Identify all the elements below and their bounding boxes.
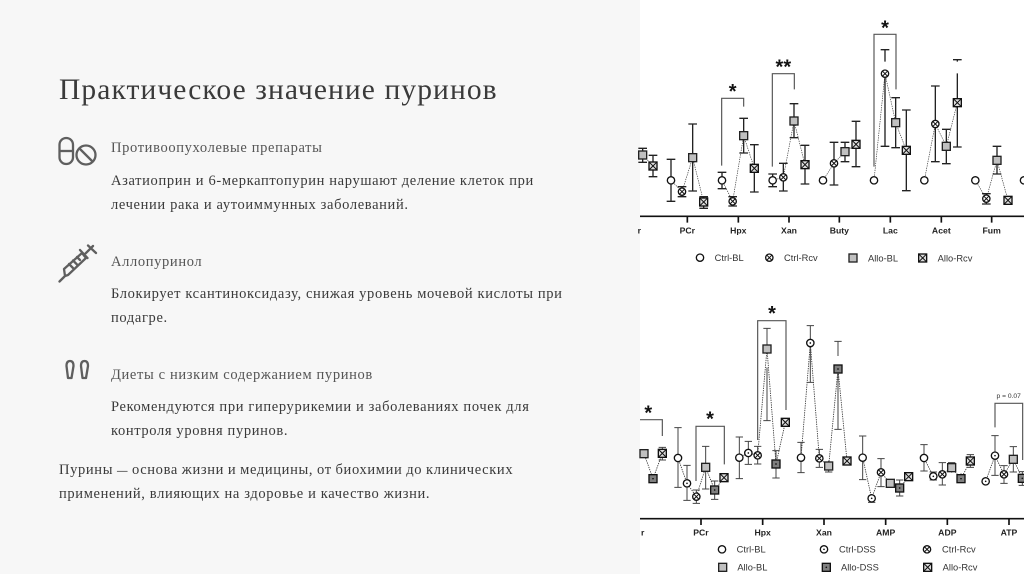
legend: Ctrl-Rcv [942, 545, 976, 555]
heading: allopurinol: Аллопуринол [111, 254, 202, 270]
text block: allopurinol [111, 286, 563, 326]
error bars [659, 326, 1024, 503]
data markers [640, 339, 1024, 502]
legend: Ctrl-BL [715, 253, 744, 263]
text block: low purine diets [111, 398, 530, 438]
text block: conclusion [59, 462, 513, 502]
legend: Allo-Rcv [938, 254, 973, 264]
x axis: Lac [883, 225, 898, 235]
x axis [640, 519, 1024, 538]
significance stars: * [729, 81, 737, 103]
x axis: r [641, 528, 645, 538]
x axis: Fum [983, 225, 1001, 235]
heading: low purine diets: Диеты с низким содержанием пуринов [111, 366, 373, 382]
x axis: Xan [816, 528, 832, 538]
x axis: AMP [876, 528, 896, 538]
text block: conclusion: Пурины — основа жизни и медицины, от биохимии до клинических [59, 462, 513, 478]
text block: low purine diets: контроля уровня пуринов. [111, 422, 288, 438]
data markers [639, 70, 1024, 206]
legend: Ctrl-BL [737, 545, 766, 555]
icon: pill and prohibition sign [60, 138, 96, 164]
x axis: ADP [938, 528, 957, 538]
dashed connectors [643, 74, 1008, 202]
text block: antitumor drugs: лечении рака и аутоиммунных заболеваний. [111, 196, 409, 212]
x axis: PCr [680, 225, 696, 235]
significance stars: * [881, 17, 889, 39]
significance labels [644, 303, 1021, 430]
text block: low purine diets: Рекомендуются при гиперурикемии и заболеваниях почек для [111, 398, 530, 414]
significance labels: * [706, 408, 714, 430]
error bars [638, 50, 1001, 208]
x axis: Hpx [754, 528, 771, 538]
legend: Allo-DSS [841, 563, 879, 573]
panel: left text panel [0, 0, 640, 574]
significance stars [729, 17, 889, 103]
legend: Ctrl-Rcv [784, 253, 818, 263]
legend: Allo-BL [868, 254, 898, 264]
title: Практическое значение пуринов [59, 74, 498, 106]
x axis: Acet [932, 225, 951, 235]
x axis: PCr [693, 528, 709, 538]
heading: antitumor drugs: Противоопухолевые препараты [111, 140, 323, 156]
chart: bottom metabolite dot plot [640, 303, 1024, 573]
text block: antitumor drugs: Азатиоприн и 6-меркаптопурин нарушают деление клеток при [111, 172, 534, 188]
significance brackets [722, 34, 896, 167]
chart: top metabolite dot plot [638, 17, 1024, 264]
x axis: r [638, 225, 642, 235]
legend: Allo-Rcv [943, 563, 978, 573]
significance brackets [640, 321, 1023, 481]
x axis: Xan [781, 225, 797, 235]
significance labels: p = 0.07 [997, 393, 1021, 400]
legend: Ctrl-DSS [839, 545, 876, 555]
x axis: Buty [830, 225, 849, 235]
significance stars: ** [776, 56, 791, 78]
significance labels: * [768, 303, 776, 325]
text block: allopurinol: Блокирует ксантиноксидазу, снижая уровень мочевой кислоты при [111, 286, 563, 302]
text block: antitumor drugs [111, 172, 534, 212]
text block: allopurinol: подагре. [111, 310, 168, 326]
dashed connectors [644, 343, 1022, 498]
icon: syringe [60, 246, 96, 282]
x axis: ATP [1001, 528, 1018, 538]
x axis: Hpx [730, 225, 747, 235]
legend [696, 253, 973, 264]
significance labels: * [644, 402, 652, 424]
x axis [638, 216, 1024, 235]
legend: Allo-BL [737, 563, 767, 573]
text block: conclusion: применений, влияющих на здоровье и качество жизни. [59, 486, 430, 502]
legend [718, 545, 978, 573]
icon: two capsules [66, 361, 88, 378]
